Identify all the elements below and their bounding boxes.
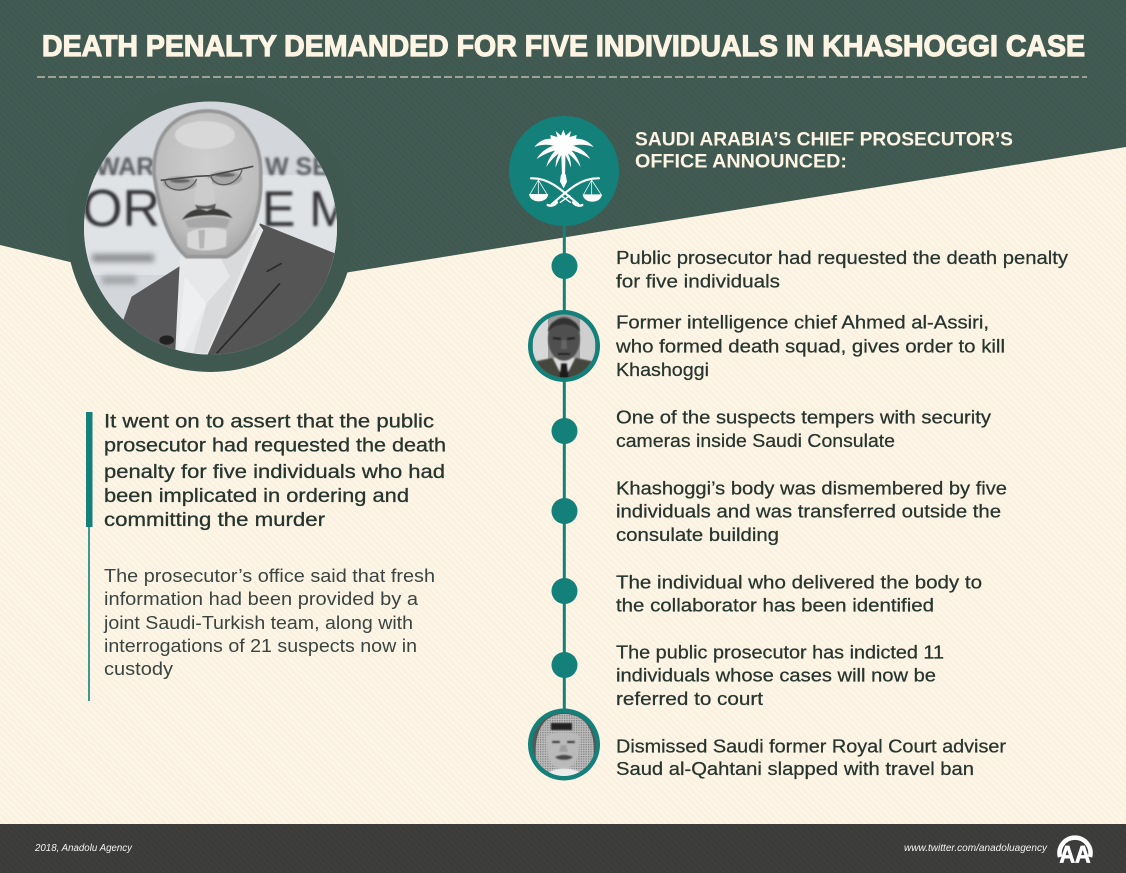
timeline text 7: Saud al-Qahtani slapped with travel ban — [616, 758, 974, 779]
timeline dot 6 — [552, 652, 578, 678]
portrait: Jamal Khashoggi: W SE — [265, 153, 329, 181]
timeline dot 3 — [552, 418, 578, 444]
timeline dot 5 — [552, 578, 578, 604]
text block: emphasised statement: committing the murder — [104, 509, 326, 531]
timeline text 5 — [616, 572, 982, 616]
mustache — [182, 209, 233, 220]
lapel microphone — [159, 335, 174, 345]
timeline text 3: cameras inside Saudi Consulate — [616, 430, 895, 451]
trunk and pen nib — [561, 144, 566, 177]
palm crown — [550, 130, 577, 146]
shirt — [175, 222, 263, 357]
portrait: Ahmed al-Assiri — [528, 310, 600, 385]
portrait: Jamal Khashoggi: E M — [262, 181, 351, 237]
timeline dot 4 — [552, 498, 578, 524]
timeline text 4: individuals and was transferred outside the — [616, 500, 1001, 522]
title: DEATH PENALTY DEMANDED FOR FIVE INDIVIDUALS IN KHASHOGGI CASE — [42, 30, 1085, 63]
timeline dot 1 — [552, 253, 578, 279]
head — [154, 111, 261, 257]
text block: emphasised statement: It went on to assert that the public — [104, 410, 434, 432]
timeline text 4: consulate building — [616, 524, 779, 545]
timeline text 3 — [616, 406, 992, 451]
timeline text 5: the collaborator has been identified — [616, 594, 934, 616]
jacket — [124, 266, 180, 350]
footer bar — [0, 824, 1126, 873]
timeline text 2 — [615, 312, 1005, 380]
timeline text 4: Khashoggi’s body was dismembered by five — [616, 478, 1007, 498]
timeline text 6 — [616, 642, 944, 709]
text block: prosecutor's office detail: interrogations of 21 suspects now in — [104, 636, 417, 656]
quote bar — [86, 412, 92, 527]
timeline text 4 — [616, 478, 1007, 545]
nose — [196, 178, 212, 186]
timeline text 2: Former intelligence chief Ahmed al-Assiri, — [616, 312, 989, 332]
text block: prosecutor's office detail: custody — [104, 659, 174, 679]
heading: Saudi prosecutor's office — [635, 130, 1013, 173]
timeline axis — [563, 220, 566, 715]
timeline text 6: referred to court — [616, 688, 763, 709]
glasses — [161, 166, 253, 180]
timeline text 1: for five individuals — [616, 271, 780, 292]
lapel lines — [217, 263, 282, 353]
heading: Saudi prosecutor's office: OFFICE ANNOUNCED: — [635, 152, 847, 173]
timeline text 2: who formed death squad, gives order to kill — [615, 336, 1005, 356]
swords — [531, 178, 599, 206]
timeline text 6: The public prosecutor has indicted 11 — [616, 642, 944, 662]
text block: prosecutor's office detail: The prosecutor’s office said that fresh — [104, 566, 435, 586]
timeline text 6: individuals whose cases will now be — [616, 664, 936, 686]
footer credit: 2018, Anadolu Agency — [34, 843, 133, 854]
portrait: Jamal Khashoggi: OR — [82, 180, 160, 238]
text block: prosecutor's office detail: information had been provided by a — [104, 589, 419, 609]
text block: emphasised statement: prosecutor had requested the death — [104, 434, 446, 456]
timeline text 1: Public prosecutor had requested the death penalty — [616, 247, 1069, 268]
goatee — [187, 228, 227, 250]
timeline text 7: Dismissed Saudi former Royal Court adviser — [616, 736, 1006, 756]
timeline text 3: One of the suspects tempers with security — [616, 406, 992, 428]
portrait: Saud al-Qahtani — [528, 708, 600, 782]
text block: prosecutor's office detail: joint Saudi-Turkish team, along with — [103, 613, 413, 633]
lower lip shade — [185, 217, 230, 228]
portrait: Jamal Khashoggi: WAR — [96, 153, 154, 181]
icon: Anadolu Agency logo: AA — [1060, 842, 1090, 868]
eye shade — [163, 176, 197, 191]
portrait: Jamal Khashoggi — [66, 84, 354, 372]
timeline text 1 — [616, 247, 1069, 292]
text block: emphasised statement: penalty for five individuals who had — [104, 461, 445, 483]
scales — [530, 180, 601, 194]
heading: Saudi prosecutor's office: SAUDI ARABIA’S CHIEF PROSECUTOR’S — [635, 130, 1013, 151]
forehead highlight — [175, 121, 235, 149]
text block: prosecutor's office detail — [103, 566, 435, 679]
text block: emphasised statement — [104, 410, 446, 531]
dark green angled header background — [0, 0, 1126, 296]
text block: emphasised statement: been implicated in ordering and — [104, 485, 409, 507]
timeline text 2: Khashoggi — [616, 359, 709, 380]
footer social link: www.twitter.com/anadoluagency — [904, 843, 1048, 854]
icon: Saudi emblem — [509, 116, 619, 226]
timeline text 5: The individual who delivered the body to — [616, 572, 982, 592]
timeline text 7 — [616, 736, 1006, 779]
